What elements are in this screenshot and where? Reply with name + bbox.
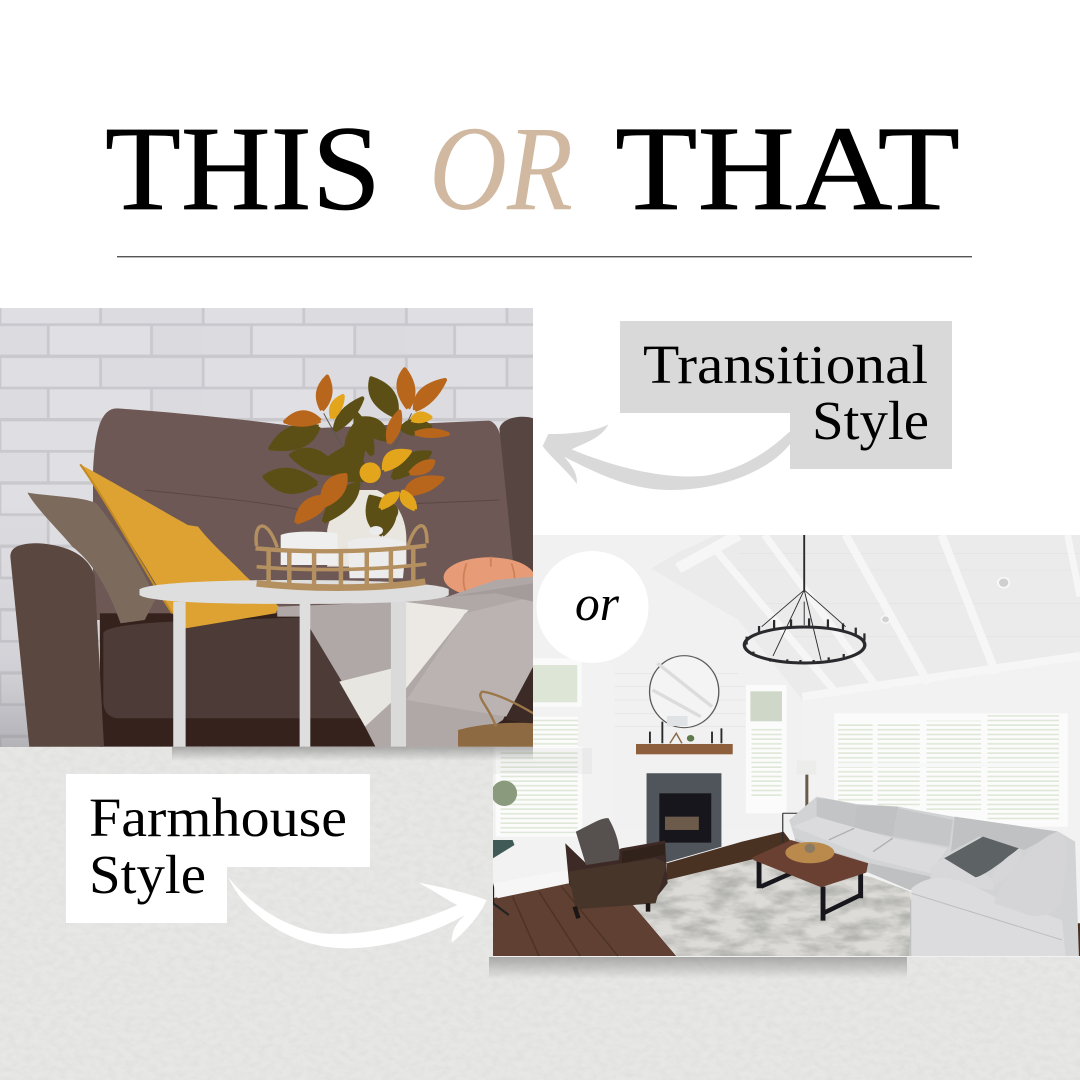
shadow band under sofa photo — [172, 747, 592, 774]
vase — [327, 490, 406, 567]
photo: transitional sofa — [0, 300, 540, 760]
white cups in tray — [281, 526, 406, 578]
label: Transitional Style: Transitional — [643, 334, 928, 395]
brick wall — [0, 300, 540, 760]
arrow: farmhouse label to living room photo — [228, 877, 487, 948]
or circle badge: or — [575, 575, 620, 631]
pumpkin — [444, 556, 533, 592]
fireplace — [647, 773, 721, 862]
label: Transitional Style: Style — [812, 390, 929, 451]
or circle badge — [536, 551, 648, 663]
concrete background panel — [0, 747, 1080, 1080]
side table and plant at left — [492, 781, 517, 915]
label: Farmhouse Style — [66, 774, 370, 923]
title: THIS — [105, 102, 381, 236]
title: OR — [429, 102, 573, 236]
wall baseboard — [493, 880, 569, 898]
label: Farmhouse Style: Style — [89, 844, 206, 905]
sectional sofa — [789, 797, 1079, 956]
windows — [496, 658, 1068, 837]
autumn leaves — [264, 369, 448, 535]
sofa — [10, 408, 533, 747]
blanket — [277, 577, 533, 747]
armchair — [565, 818, 668, 918]
arrow: transitional label to sofa photo — [543, 424, 791, 490]
woven tray — [256, 526, 427, 588]
divider line under title — [117, 256, 972, 257]
chandelier — [744, 535, 865, 663]
photo: farmhouse living room — [490, 530, 1080, 970]
floor — [493, 832, 1080, 956]
lamp and side table — [782, 774, 808, 843]
mantel and decor — [636, 722, 733, 754]
rug — [632, 858, 911, 956]
mustard pillow — [80, 464, 279, 628]
mirror — [650, 656, 719, 728]
label: Transitional Style — [620, 321, 952, 469]
grey pillow — [28, 493, 155, 623]
label: Farmhouse Style: Farmhouse — [89, 787, 347, 848]
title: THAT — [615, 102, 960, 236]
shadow under living room photo — [489, 957, 907, 979]
side table — [139, 580, 449, 747]
wicker basket — [458, 692, 533, 747]
title — [105, 102, 960, 236]
coffee table — [753, 840, 868, 921]
